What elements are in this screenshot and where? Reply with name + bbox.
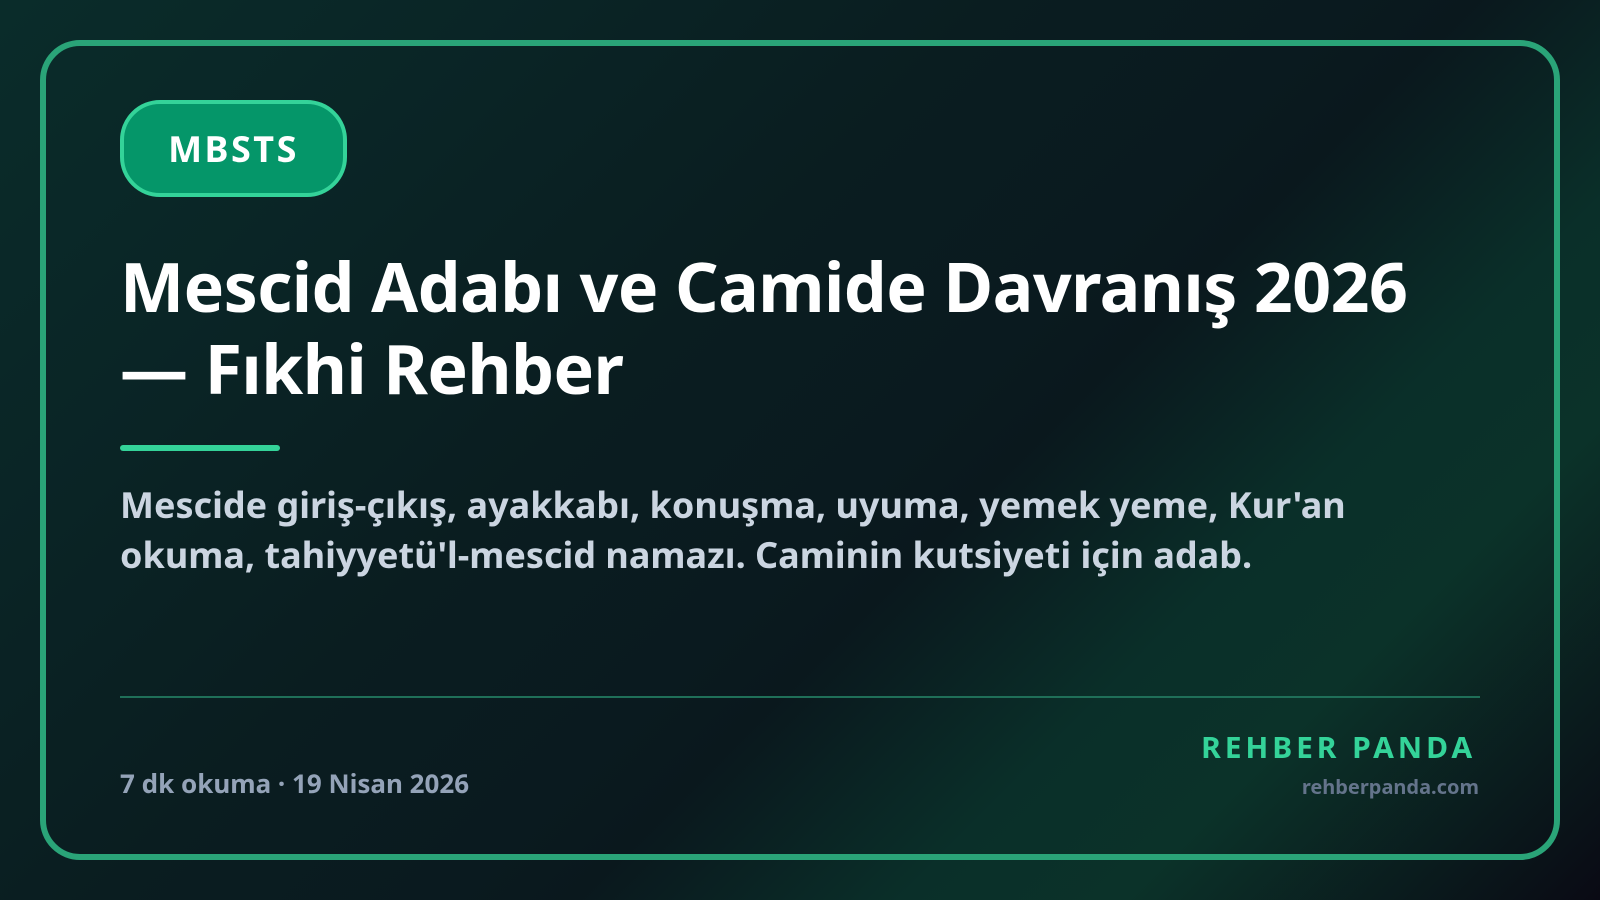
accent rule	[120, 445, 280, 451]
divider	[120, 696, 1480, 698]
brand name: REHBER PANDA	[1201, 726, 1476, 767]
badge: MBSTS: MBSTS	[168, 124, 299, 173]
title: — Fıkhi Rehber	[120, 321, 623, 414]
badge: MBSTS	[120, 100, 347, 197]
subtitle text: Mescide giriş-çıkış, ayakkabı, konuşma, uyuma, yemek yeme, Kur'an	[120, 480, 1346, 529]
subtitle text: okuma, tahiyyetü'l-mescid namazı. Caminin kutsiyeti için adab.	[120, 530, 1252, 579]
reading time and date: 7 dk okuma · 19 Nisan 2026	[120, 765, 469, 801]
subtitle text	[120, 480, 1346, 579]
title: Mescid Adabı ve Camide Davranış 2026	[120, 239, 1407, 332]
title	[120, 239, 1407, 414]
website: rehberpanda.com	[1302, 773, 1479, 800]
